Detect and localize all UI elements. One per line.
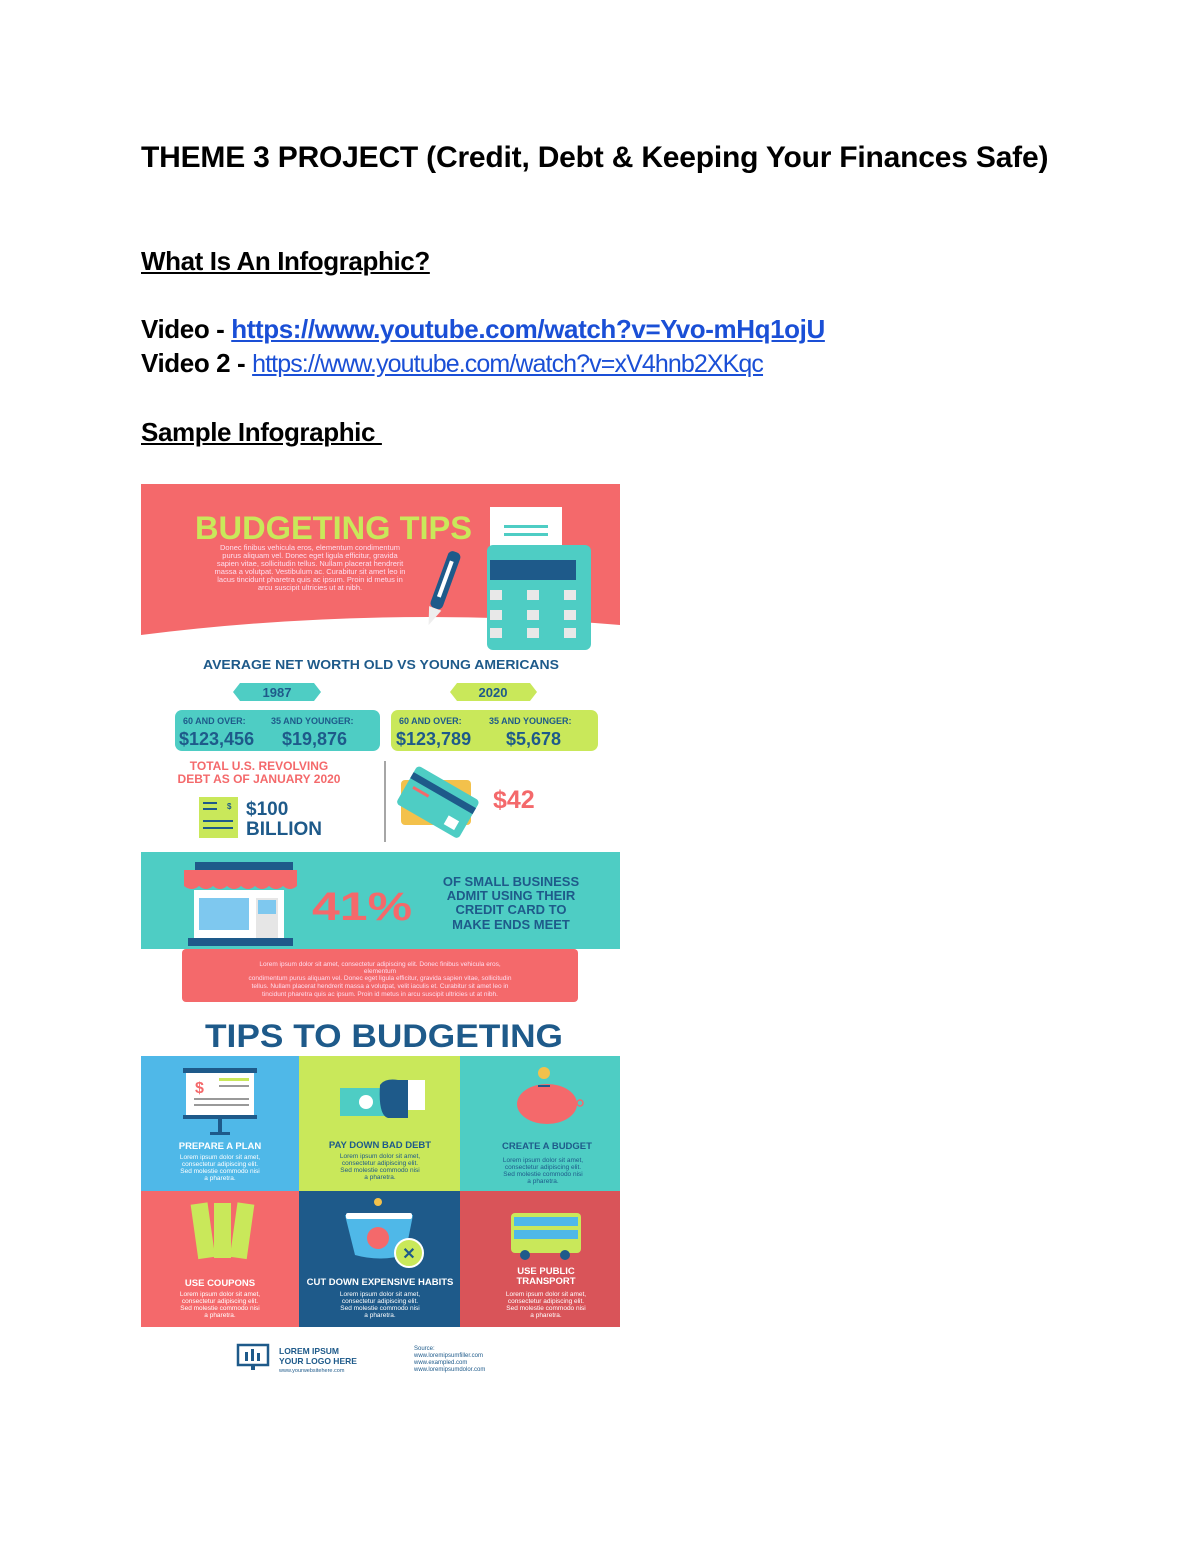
net worth heading: AVERAGE NET WORTH OLD VS YOUNG AMERICANS: [203, 657, 559, 672]
header body text: purus aliquam vel. Donec eget ligula efficitur, gravida: [222, 551, 399, 560]
tile: pay down bad debt: [299, 1056, 460, 1191]
footer: logo: LOREM IPSUM: [279, 1346, 339, 1356]
stat text: CREDIT CARD TO: [456, 902, 566, 917]
header body text: [215, 543, 405, 592]
tile: use public transport: consectetur adipiscing elit.: [508, 1298, 584, 1305]
tile: pay down bad debt: a pharetra.: [364, 1174, 396, 1181]
panel: red lorem box: [182, 949, 578, 1002]
tile: prepare a plan: Sed molestie commodo nisi: [180, 1168, 260, 1175]
video link 1: Video - https://www.youtube.com/watch?v=Yvo-mHq1ojU: [141, 314, 825, 344]
tile: cut down expensive habits: consectetur adipiscing elit.: [342, 1298, 418, 1305]
tag: 2020: 2020: [479, 685, 507, 700]
tile: pay down bad debt: consectetur adipiscing elit.: [342, 1160, 418, 1167]
box: 2020 values: 35 AND YOUNGER:: [489, 716, 572, 726]
box: 2020 values: 60 AND OVER:: [399, 716, 462, 726]
footer: sources: www.loremipsumfiller.com: [413, 1353, 483, 1359]
header body text: sapien vitae, sollicitudin tellus. Nullam placerat hendrerit: [217, 559, 404, 568]
revolving debt text: TOTAL U.S. REVOLVING: [190, 759, 328, 773]
box: 2020 values: $123,789: [396, 729, 471, 749]
tile: create a budget: Lorem ipsum dolor sit amet,: [503, 1157, 583, 1164]
panel: red lorem box: elementum: [364, 968, 396, 975]
revolving debt text: [178, 759, 341, 786]
stat text: MAKE ENDS MEET: [452, 917, 570, 932]
tile: use public transport: Lorem ipsum dolor sit amet,: [506, 1291, 586, 1298]
tile: pay down bad debt: Lorem ipsum dolor sit amet,: [340, 1153, 420, 1160]
tile: use public transport: Sed molestie commodo nisi: [506, 1305, 586, 1312]
icon: store: [184, 862, 297, 946]
stat: $100 billion: BILLION: [246, 819, 322, 840]
tile: use public transport: [460, 1191, 620, 1327]
header body text: arcu suscipit ultricies ut at nibh.: [258, 583, 362, 592]
tile: pay down bad debt: Sed molestie commodo nisi: [340, 1167, 420, 1174]
tag: 2020: [450, 683, 537, 701]
footer: logo: YOUR LOGO HERE: [279, 1356, 357, 1366]
icon: cheque: [199, 797, 238, 838]
panel: small business: [141, 852, 620, 949]
tile: use public transport: a pharetra.: [530, 1312, 562, 1319]
tile: prepare a plan: $: [195, 1080, 204, 1097]
stat text: ADMIT USING THEIR: [447, 888, 576, 903]
footer: sources: Source:: [414, 1346, 435, 1352]
video link 2: Video 2 - https://www.youtube.com/watch?v=xV4hnb2XKqc: [141, 348, 763, 378]
tile: prepare a plan: Lorem ipsum dolor sit amet,: [180, 1154, 260, 1161]
tile: use public transport: USE PUBLIC: [517, 1266, 575, 1277]
box: 1987 values: $123,456: [179, 729, 254, 749]
tile: prepare a plan: [141, 1056, 299, 1191]
box: 1987 values: $19,876: [282, 729, 347, 749]
panel: tips grid: [141, 1056, 620, 1327]
stat text: [443, 874, 579, 932]
icon: credit cards: [396, 765, 480, 839]
revolving debt text: DEBT AS OF JANUARY 2020: [178, 772, 341, 786]
header panel: [141, 484, 620, 650]
footer: sources: www.loremipsumdolor.com: [413, 1367, 485, 1373]
tile: create a budget: a pharetra.: [527, 1178, 559, 1185]
header body text: massa a volutpat. Vestibulum ac. Curabitur sit amet leo in: [215, 567, 405, 576]
icon: calculator: [487, 507, 591, 650]
footer: logo: www.yourwebsitehere.com: [278, 1368, 345, 1374]
tile: prepare a plan: consectetur adipiscing elit.: [182, 1161, 258, 1168]
icon: cheque: $: [227, 802, 232, 811]
heading: tips to budgeting: TIPS TO BUDGETING: [205, 1018, 563, 1054]
tile: use coupons: Lorem ipsum dolor sit amet,: [180, 1291, 260, 1298]
tile: use public transport: TRANSPORT: [516, 1276, 576, 1287]
panel: red lorem box: Lorem ipsum dolor sit amet, consectetur adipiscing elit. Donec finibus vehicula eros,: [259, 961, 501, 968]
panel: red lorem box: tincidunt pharetra quis ac ipsum. Proin id metus in arcu suscipit ultricies ut at nibh.: [262, 991, 498, 998]
heading: what is an infographic: What Is An Infographic?: [141, 246, 430, 276]
tile: use coupons: Sed molestie commodo nisi: [180, 1305, 260, 1312]
tile: cut down expensive habits: CUT DOWN EXPENSIVE HABITS: [307, 1277, 453, 1288]
footer: sources: www.exampled.com: [413, 1360, 467, 1366]
box: 1987 values: [175, 710, 380, 751]
title: THEME 3 PROJECT (Credit, Debt & Keeping Your Finances Safe): [141, 141, 1048, 174]
box: 2020 values: [391, 710, 598, 751]
box: 2020 values: $5,678: [506, 729, 561, 749]
box: 1987 values: 60 AND OVER:: [183, 716, 246, 726]
tile: cut down expensive habits: ✕: [402, 1246, 416, 1263]
header title: BUDGETING TIPS: [195, 510, 472, 546]
stat: 41%: 41%: [312, 885, 412, 929]
footer: sources: [413, 1346, 485, 1373]
tile: cut down expensive habits: a pharetra.: [364, 1312, 396, 1319]
tile: use coupons: a pharetra.: [204, 1312, 236, 1319]
tile: use coupons: USE COUPONS: [185, 1278, 255, 1289]
icon: pen: [423, 550, 462, 627]
tag: 1987: 1987: [263, 685, 291, 700]
stat text: OF SMALL BUSINESS: [443, 874, 579, 889]
tile: prepare a plan: PREPARE A PLAN: [179, 1141, 261, 1152]
tile: create a budget: Sed molestie commodo nisi: [503, 1171, 583, 1178]
box: 1987 values: 35 AND YOUNGER:: [271, 716, 354, 726]
stat: $100 billion: $100: [246, 799, 288, 820]
tile: cut down expensive habits: Sed molestie commodo nisi: [340, 1305, 420, 1312]
header body text: lacus tincidunt pharetra quis ac ipsum. Proin id metus in: [217, 575, 403, 584]
tile: prepare a plan: a pharetra.: [204, 1175, 236, 1182]
panel: red lorem box: tellus. Nullam placerat hendrerit massa a volutpat, velit iaculis et. Curabitur sit amet leo in: [252, 983, 509, 990]
tile: pay down bad debt: PAY DOWN BAD DEBT: [329, 1140, 431, 1151]
tile: use coupons: [141, 1191, 299, 1327]
tile: use coupons: consectetur adipiscing elit.: [182, 1298, 258, 1305]
tag: 1987: [233, 683, 321, 701]
stat: $42: $42: [493, 786, 535, 814]
tile: cut down expensive habits: [299, 1191, 460, 1327]
panel: red lorem box: condimentum purus aliquam vel. Donec eget ligula efficitur, gravida sapien vitae, sollicitudin: [249, 975, 512, 982]
tile: create a budget: CREATE A BUDGET: [502, 1141, 592, 1152]
footer: logo: [238, 1345, 357, 1374]
stat: $100 billion: [246, 799, 322, 840]
tile: cut down expensive habits: Lorem ipsum dolor sit amet,: [340, 1291, 420, 1298]
tile: create a budget: [460, 1056, 620, 1191]
infographic: [141, 484, 620, 1374]
heading: sample infographic: Sample Infographic: [141, 417, 375, 447]
header body text: Donec finibus vehicula eros, elementum condimentum: [220, 543, 400, 552]
tile: create a budget: consectetur adipiscing elit.: [505, 1164, 581, 1171]
